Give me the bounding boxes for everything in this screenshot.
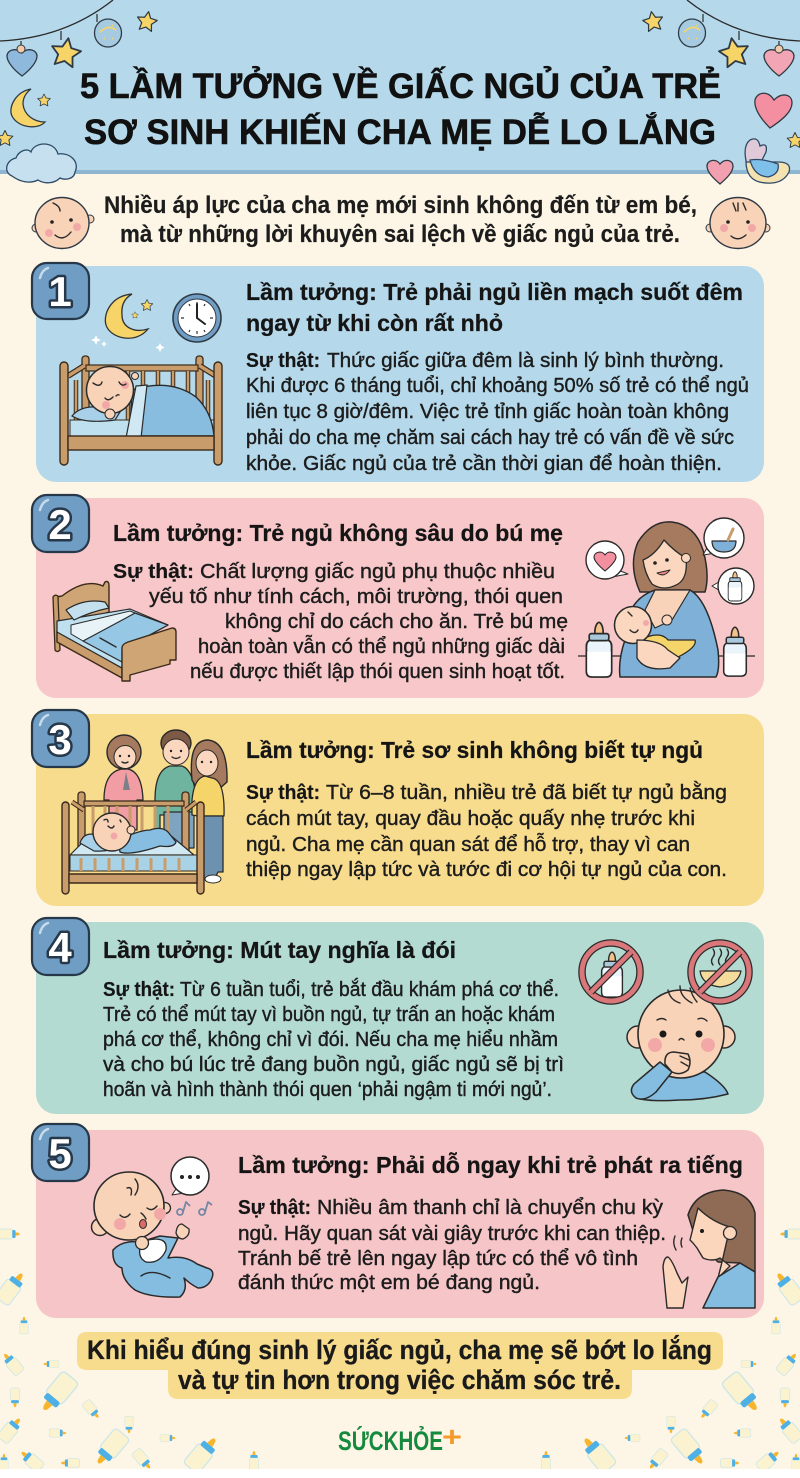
bunting right with decorations [642, 0, 800, 184]
icon: music notes [177, 1202, 212, 1215]
logo: + [442, 1421, 462, 1452]
text block: Từ 6 tuần tuổi, trẻ bắt đầu khám phá cơ thể. [180, 978, 559, 1001]
header band [0, 0, 800, 174]
closing message: và tự tin hơn trong việc chăm sóc trẻ. [178, 1365, 621, 1395]
text block [113, 560, 568, 683]
bunting left with decorations [0, 0, 158, 183]
icon: bottle bubble [712, 568, 754, 604]
text block: thiệp ngay lập tức và tước đi cơ hội tự ngủ của con. [246, 858, 727, 881]
logo: SỨCKHỎE [338, 1424, 443, 1456]
decorative bottle pattern right [541, 1229, 800, 1474]
icon: no bottle [582, 943, 640, 1001]
text block: liên tục 8 giờ/đêm. Việc trẻ tỉnh giấc hoàn toàn không [246, 400, 729, 423]
text block: Sự thật: [246, 349, 320, 372]
icon: heart bubble [586, 541, 628, 579]
heading: ngay từ khi còn rất nhỏ [246, 310, 503, 336]
text block: nếu được thiết lập thói quen sinh hoạt tốt. [190, 660, 565, 683]
illustration: family watching baby in crib [62, 730, 227, 894]
text block: Thức giấc giữa đêm là sinh lý bình thường. [327, 349, 724, 372]
title: 5 LẦM TƯỞNG VỀ GIẤC NGỦ CỦA TRẺ [80, 66, 721, 106]
text block: và cho bú lúc trẻ đang buồn ngủ, giấc ngủ sẽ bị trì [103, 1053, 564, 1076]
number badge 2: 2 [48, 501, 72, 548]
closing message: Khi hiểu đúng sinh lý giấc ngủ, cha mẹ sẽ bớt lo lắng [87, 1335, 712, 1365]
text block: hoãn và hình thành thói quen ‘phải ngậm ti mới ngủ’. [103, 1078, 552, 1101]
number badge 5: 5 [48, 1130, 72, 1177]
text block: ngủ. Hãy quan sát vài giây trước khi can thiệp. [238, 1222, 666, 1245]
text block [246, 781, 727, 881]
heading: Lầm tưởng: Trẻ sơ sinh không biết tự ngủ [246, 737, 703, 763]
text block: hoàn toàn vẫn có thể ngủ những giấc dài [198, 635, 565, 658]
icon: no bowl [691, 943, 749, 1001]
number badge 4: 4 [48, 924, 72, 971]
decorative bottle pattern left [0, 1229, 259, 1474]
text block: phá cơ thể, không chỉ vì đói. Nếu cha mẹ hiểu nhầm [103, 1028, 558, 1051]
title [80, 66, 721, 152]
icon: moon and stars [91, 294, 164, 352]
text block: đánh thức một em bé đang ngủ. [238, 1271, 540, 1294]
heading: Lầm tưởng: Trẻ phải ngủ liền mạch suốt đêm [246, 279, 743, 305]
text block: Chất lượng giấc ngủ phụ thuộc nhiều [200, 560, 555, 583]
heading: Lầm tưởng: Mút tay nghĩa là đói [103, 937, 456, 963]
text block [238, 1196, 666, 1294]
illustration: baby sleeping in crib [60, 356, 222, 465]
text block: không chỉ do cách cho ăn. Trẻ bú mẹ [225, 610, 568, 633]
number badge 1 [32, 263, 89, 319]
text block: khỏe. Giấc ngủ của trẻ cần thời gian để hoàn thiện. [246, 452, 722, 475]
text block: phải do cha mẹ chăm sai cách hay trẻ có vấn đề về sức [246, 426, 734, 449]
text block: Sự thật: [246, 781, 320, 804]
father [155, 730, 196, 848]
intro text: mà từ những lời khuyên sai lệch về giấc ngủ của trẻ. [120, 221, 680, 248]
text block: Khi được 6 tháng tuổi, chỉ khoảng 50% số trẻ có thể ngủ [246, 374, 749, 397]
title: SƠ SINH KHIẾN CHA MẸ DỄ LO LẮNG [84, 112, 716, 152]
heading: Lầm tưởng: Phải dỗ ngay khi trẻ phát ra tiếng [238, 1151, 743, 1178]
text block: yếu tố như tính cách, môi trường, thói quen [149, 585, 563, 608]
text block: Sự thật: [113, 560, 194, 583]
panel: myth 1 [32, 263, 764, 482]
heading [246, 279, 743, 336]
number badge 3: 3 [48, 716, 72, 763]
third caregiver [191, 740, 227, 883]
closing message [77, 1332, 723, 1399]
text block: Trẻ có thể mút tay vì buồn ngủ, tự trấn an hoặc khám [103, 1003, 555, 1026]
icon: baby face right [706, 198, 770, 248]
illustration: empty bed [53, 582, 176, 681]
icon: pacifier [745, 139, 790, 183]
illustration: baby making sounds [92, 1157, 213, 1297]
number badge 4 [32, 918, 89, 975]
icon: clock [173, 294, 221, 342]
text block: Sự thật: [103, 978, 175, 1001]
panel: myth 4 [32, 918, 764, 1114]
illustration: baby sucking hand [582, 943, 749, 1101]
text block: ngủ. Cha mẹ cần quan sát để hỗ trợ, thay vì can [246, 833, 690, 856]
number badge 3 [32, 710, 89, 767]
text block: cách mút tay, quay đầu hoặc quấy nhẹ trước khi [246, 807, 695, 830]
icon: speech bubble [171, 1157, 209, 1195]
icon: bowl bubble [703, 518, 744, 558]
icon: big heart [755, 93, 792, 128]
crib [78, 792, 85, 870]
panel: myth 5 [32, 1124, 764, 1318]
text block: Tránh bế trẻ lên ngay lập tức có thể vô tình [238, 1247, 638, 1270]
icon: cloud [7, 144, 76, 183]
mother [104, 735, 143, 830]
panel: myth 2 [32, 495, 764, 698]
text block: Sự thật: [238, 1196, 311, 1219]
number badge 2 [32, 495, 89, 552]
text block [246, 349, 749, 475]
intro text: Nhiều áp lực của cha mẹ mới sinh không đến từ em bé, [104, 192, 697, 219]
icon: baby face left [32, 198, 94, 248]
panel: myth 3 [32, 710, 764, 906]
illustration: breastfeeding mother [578, 518, 755, 677]
text block [103, 978, 564, 1101]
number badge 1: 1 [48, 268, 72, 315]
text block: Từ 6–8 tuần, nhiều trẻ đã biết tự ngủ bằng [326, 781, 727, 804]
bottom margin [0, 1469, 800, 1478]
heading: Lầm tưởng: Trẻ ngủ không sâu do bú mẹ [113, 520, 563, 546]
text block: Nhiều âm thanh chỉ là chuyển chu kỳ [317, 1196, 664, 1219]
number badge 5 [32, 1124, 89, 1181]
intro text [104, 192, 697, 248]
illustration: woman listening with raised hand [663, 1190, 755, 1308]
